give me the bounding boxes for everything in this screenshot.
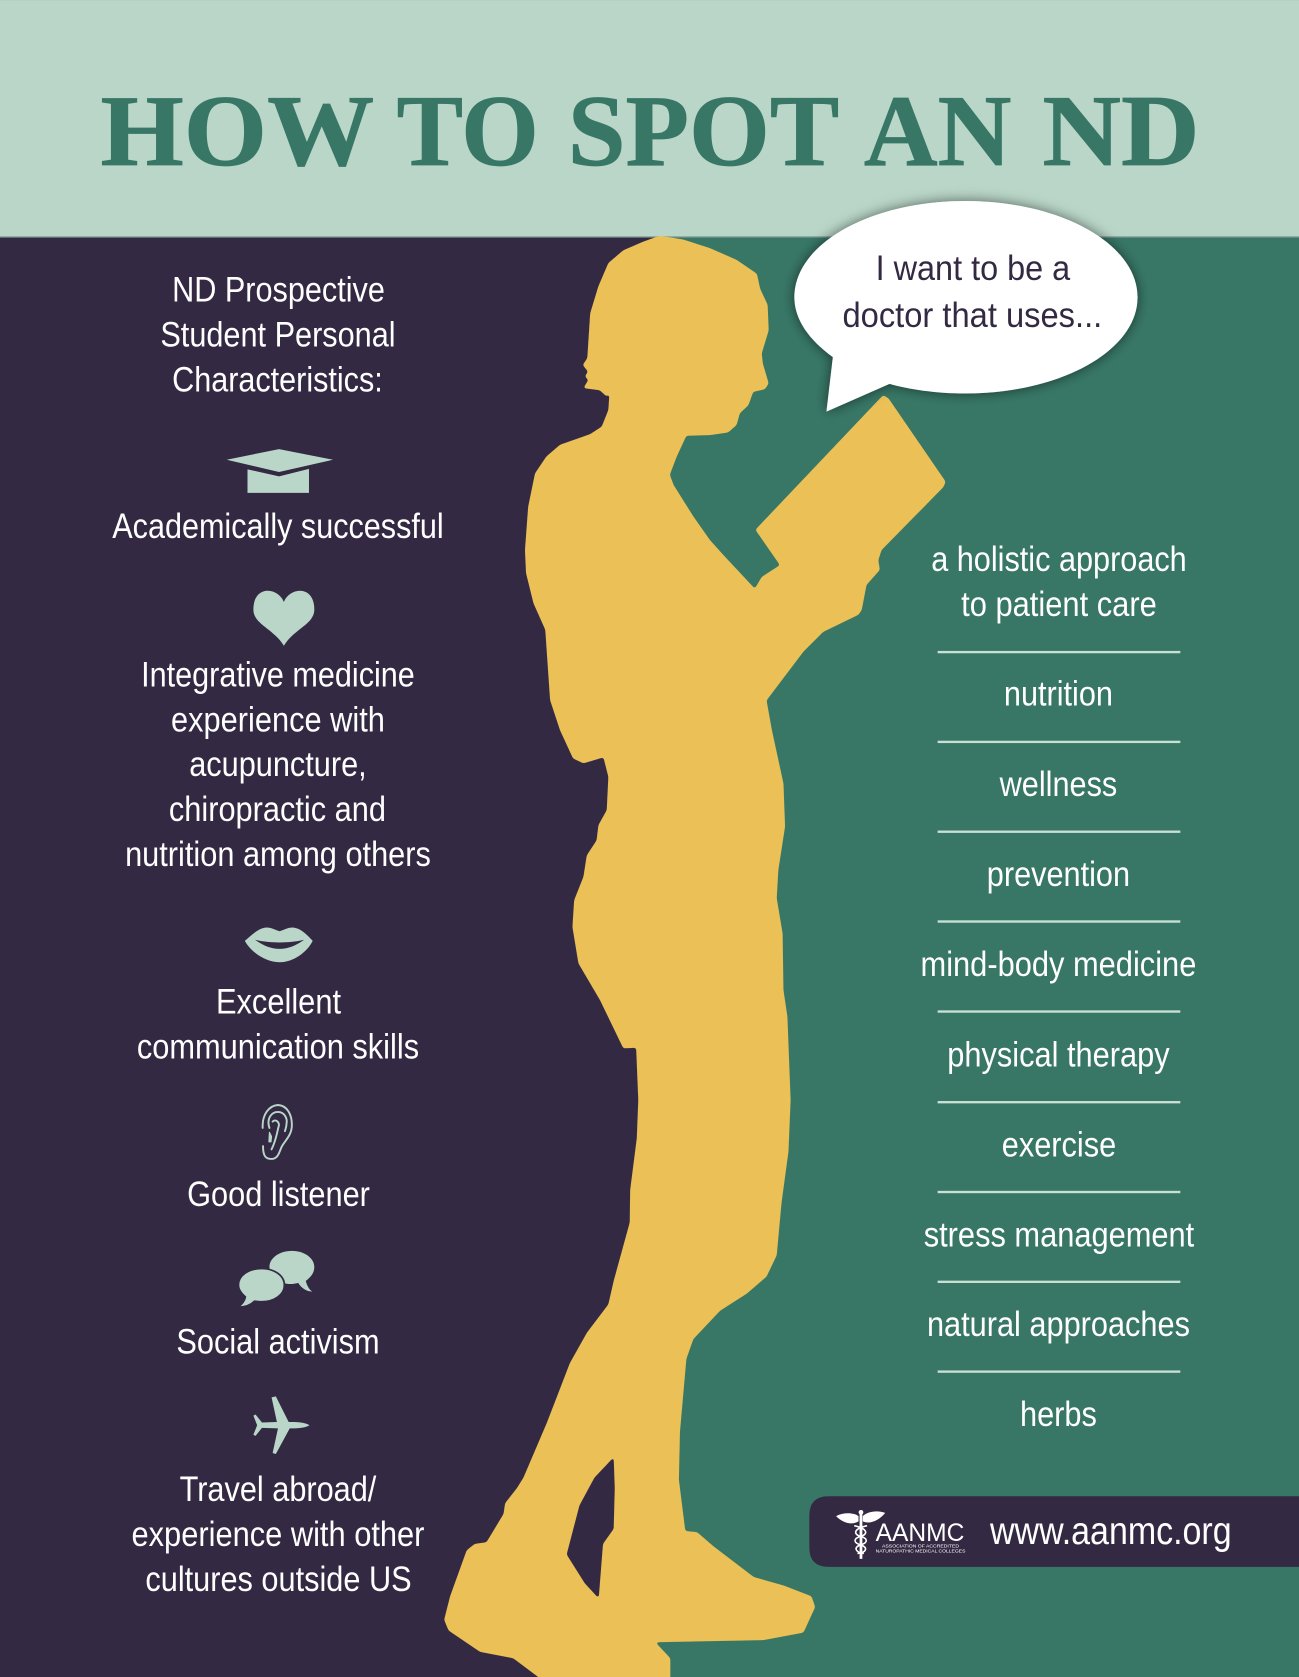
list item: holistic approach: to patient care xyxy=(961,585,1157,624)
list item: exercise: exercise xyxy=(1002,1125,1116,1164)
list item: stress management: stress management xyxy=(924,1215,1194,1254)
text: travel abroad xyxy=(132,1470,425,1599)
panel: personal characteristics xyxy=(112,271,444,1599)
text: travel abroad: experience with other xyxy=(132,1515,425,1554)
panel: green right background xyxy=(652,237,1299,1677)
logo: AANMC caduceus: NATUROPATHIC MEDICAL COLLEGES xyxy=(876,1548,965,1554)
list item: wellness: wellness xyxy=(999,765,1117,804)
panel: approaches list xyxy=(921,540,1196,1434)
silhouette: person reading a book xyxy=(444,236,946,1677)
list item: nutrition: nutrition xyxy=(1004,675,1113,714)
icon: speech bubbles xyxy=(238,1251,314,1307)
title: ND xyxy=(1042,75,1200,188)
list item: natural approaches: natural approaches xyxy=(927,1305,1190,1344)
list item: herbs: herbs xyxy=(1020,1395,1097,1434)
title: SPOT xyxy=(568,75,839,188)
text: website url: www.aanmc.org xyxy=(989,1510,1232,1553)
list item: mind-body medicine: mind-body medicine xyxy=(921,945,1196,984)
icon: lips xyxy=(245,928,313,962)
icon: ear xyxy=(263,1105,292,1159)
text: integrative medicine: nutrition among others xyxy=(125,835,431,874)
text: integrative medicine: chiropractic and xyxy=(169,790,386,829)
list item: holistic approach: a holistic approach xyxy=(931,540,1187,579)
text: integrative medicine: experience with xyxy=(171,700,385,739)
title: HOW xyxy=(100,75,374,188)
logo: AANMC caduceus: ASSOCIATION OF ACCREDITED xyxy=(882,1544,960,1550)
heading: characteristics: Characteristics: xyxy=(172,360,383,399)
heading: characteristics: ND Prospective xyxy=(172,271,385,310)
list item: physical therapy: physical therapy xyxy=(947,1036,1170,1075)
heading: characteristics: Student Personal xyxy=(160,315,396,354)
icon: airplane xyxy=(253,1396,310,1454)
title: TO xyxy=(397,75,539,188)
header band xyxy=(0,0,1299,238)
text: communication skills: Excellent xyxy=(216,983,341,1022)
list item: prevention: prevention xyxy=(987,855,1130,894)
speech bubble xyxy=(794,201,1138,412)
title: AN xyxy=(864,75,1011,188)
text: academically successful: Academically successful xyxy=(112,507,444,546)
logo: AANMC caduceus xyxy=(836,1510,965,1559)
text: travel abroad: Travel abroad/ xyxy=(180,1470,377,1509)
logo: AANMC caduceus: AANMC xyxy=(876,1520,964,1547)
speech bubble: I want to be a xyxy=(876,249,1071,288)
footer bar xyxy=(809,1496,1299,1567)
text: integrative medicine: Integrative medicine xyxy=(141,655,415,694)
speech bubble: doctor that uses... xyxy=(842,296,1102,335)
text: communication skills xyxy=(137,983,419,1066)
icon: graduation cap xyxy=(227,449,333,493)
text: travel abroad: cultures outside US xyxy=(145,1560,412,1599)
text: integrative medicine: acupuncture, xyxy=(189,745,367,784)
text: good listener: Good listener xyxy=(187,1175,370,1214)
panel: dark left background xyxy=(0,237,668,1677)
list item: holistic approach xyxy=(931,540,1187,624)
heading: characteristics xyxy=(160,271,396,399)
icon: heart xyxy=(253,591,314,646)
title xyxy=(100,75,1200,188)
text: social activism: Social activism xyxy=(176,1323,380,1362)
text: communication skills: communication skills xyxy=(137,1027,419,1066)
text: integrative medicine xyxy=(125,655,431,874)
